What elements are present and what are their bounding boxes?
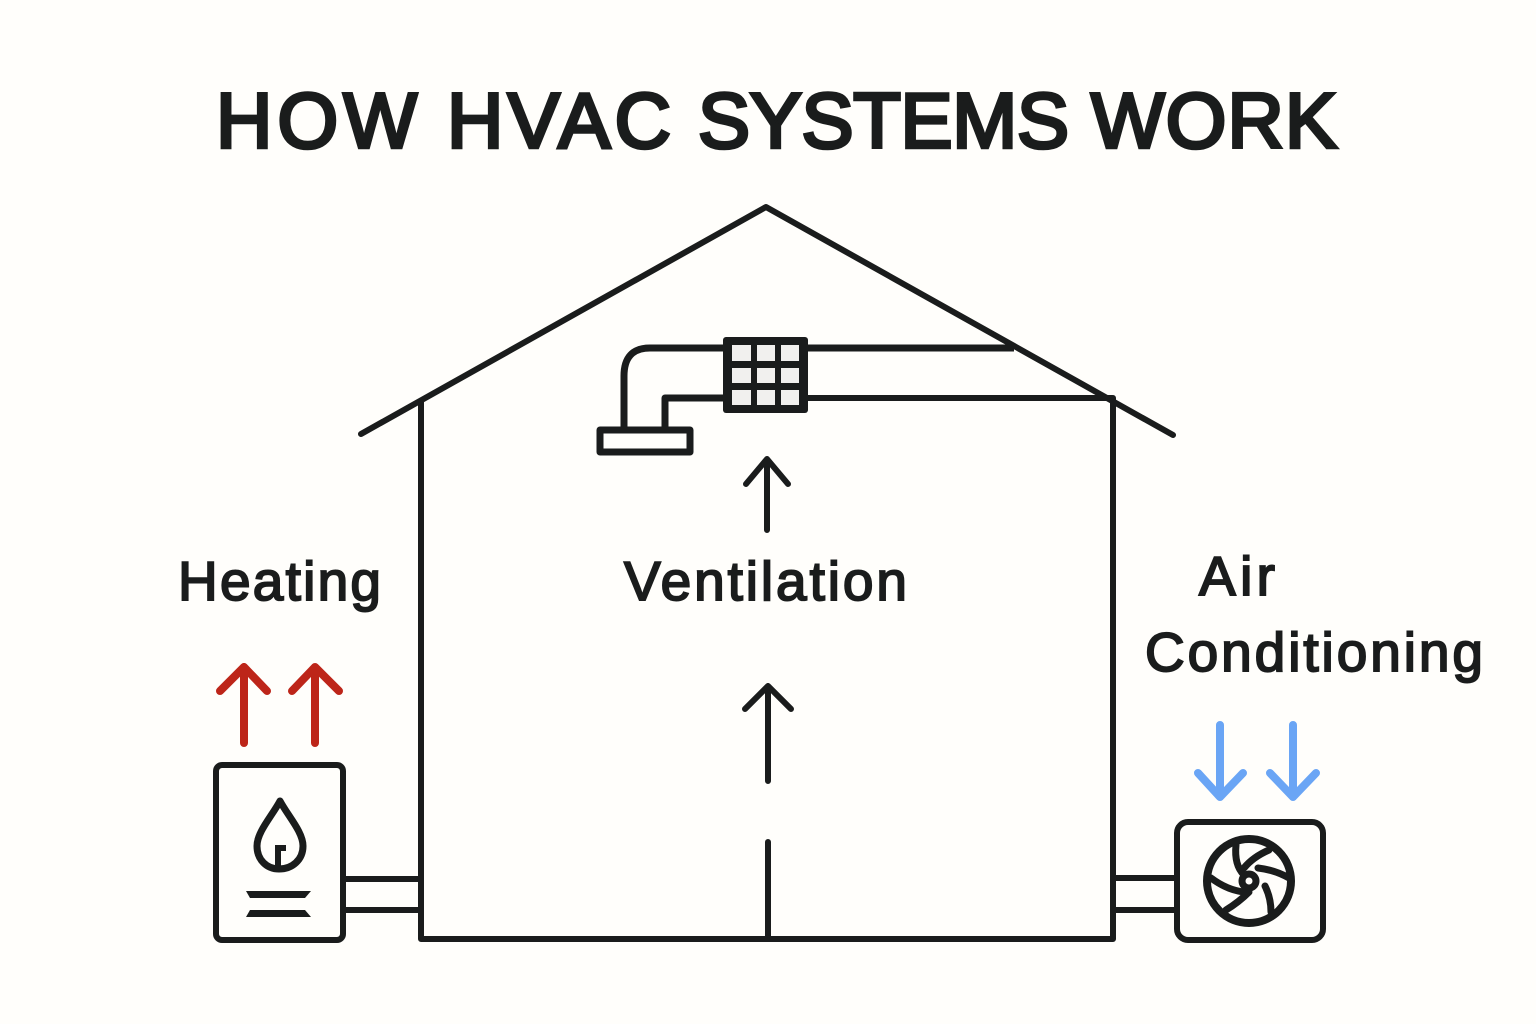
- ceiling diffuser: [600, 430, 690, 452]
- label: air conditioning: Conditioning: [1145, 621, 1483, 683]
- arrow: ventilation lower: [745, 686, 791, 781]
- title: SYSTEMS: [698, 76, 1069, 164]
- flame inner stem: [278, 848, 286, 866]
- label: air conditioning: Air: [1199, 545, 1275, 607]
- house outline: [361, 207, 1173, 939]
- title: [216, 76, 1337, 164]
- ventilation duct: [600, 348, 1014, 452]
- label: air conditioning: [1145, 545, 1483, 683]
- heating pipes: [344, 879, 420, 910]
- title: HOW: [216, 76, 417, 164]
- cooling pipes: [1114, 878, 1176, 910]
- air filter grille: [723, 337, 808, 413]
- condenser unit: [1177, 822, 1323, 940]
- icon: fan: [1207, 839, 1291, 923]
- arrow: ventilation upper: [746, 459, 788, 530]
- upper duct wall: [624, 348, 1014, 430]
- arrows: heat, red: [220, 667, 339, 743]
- roof: [361, 207, 1173, 435]
- lower duct wall: [665, 398, 725, 430]
- burner bars: [246, 891, 311, 917]
- title: HVAC: [447, 76, 671, 164]
- house walls: [421, 398, 1113, 939]
- icon: flame: [257, 801, 303, 869]
- title: WORK: [1091, 76, 1337, 164]
- interior partition: [765, 842, 771, 938]
- ceiling line: [806, 395, 1112, 401]
- label: ventilation: Ventilation: [624, 550, 907, 612]
- furnace unit: [216, 765, 343, 940]
- label: heating: Heating: [178, 550, 381, 612]
- arrows: cool air, blue: [1198, 725, 1316, 797]
